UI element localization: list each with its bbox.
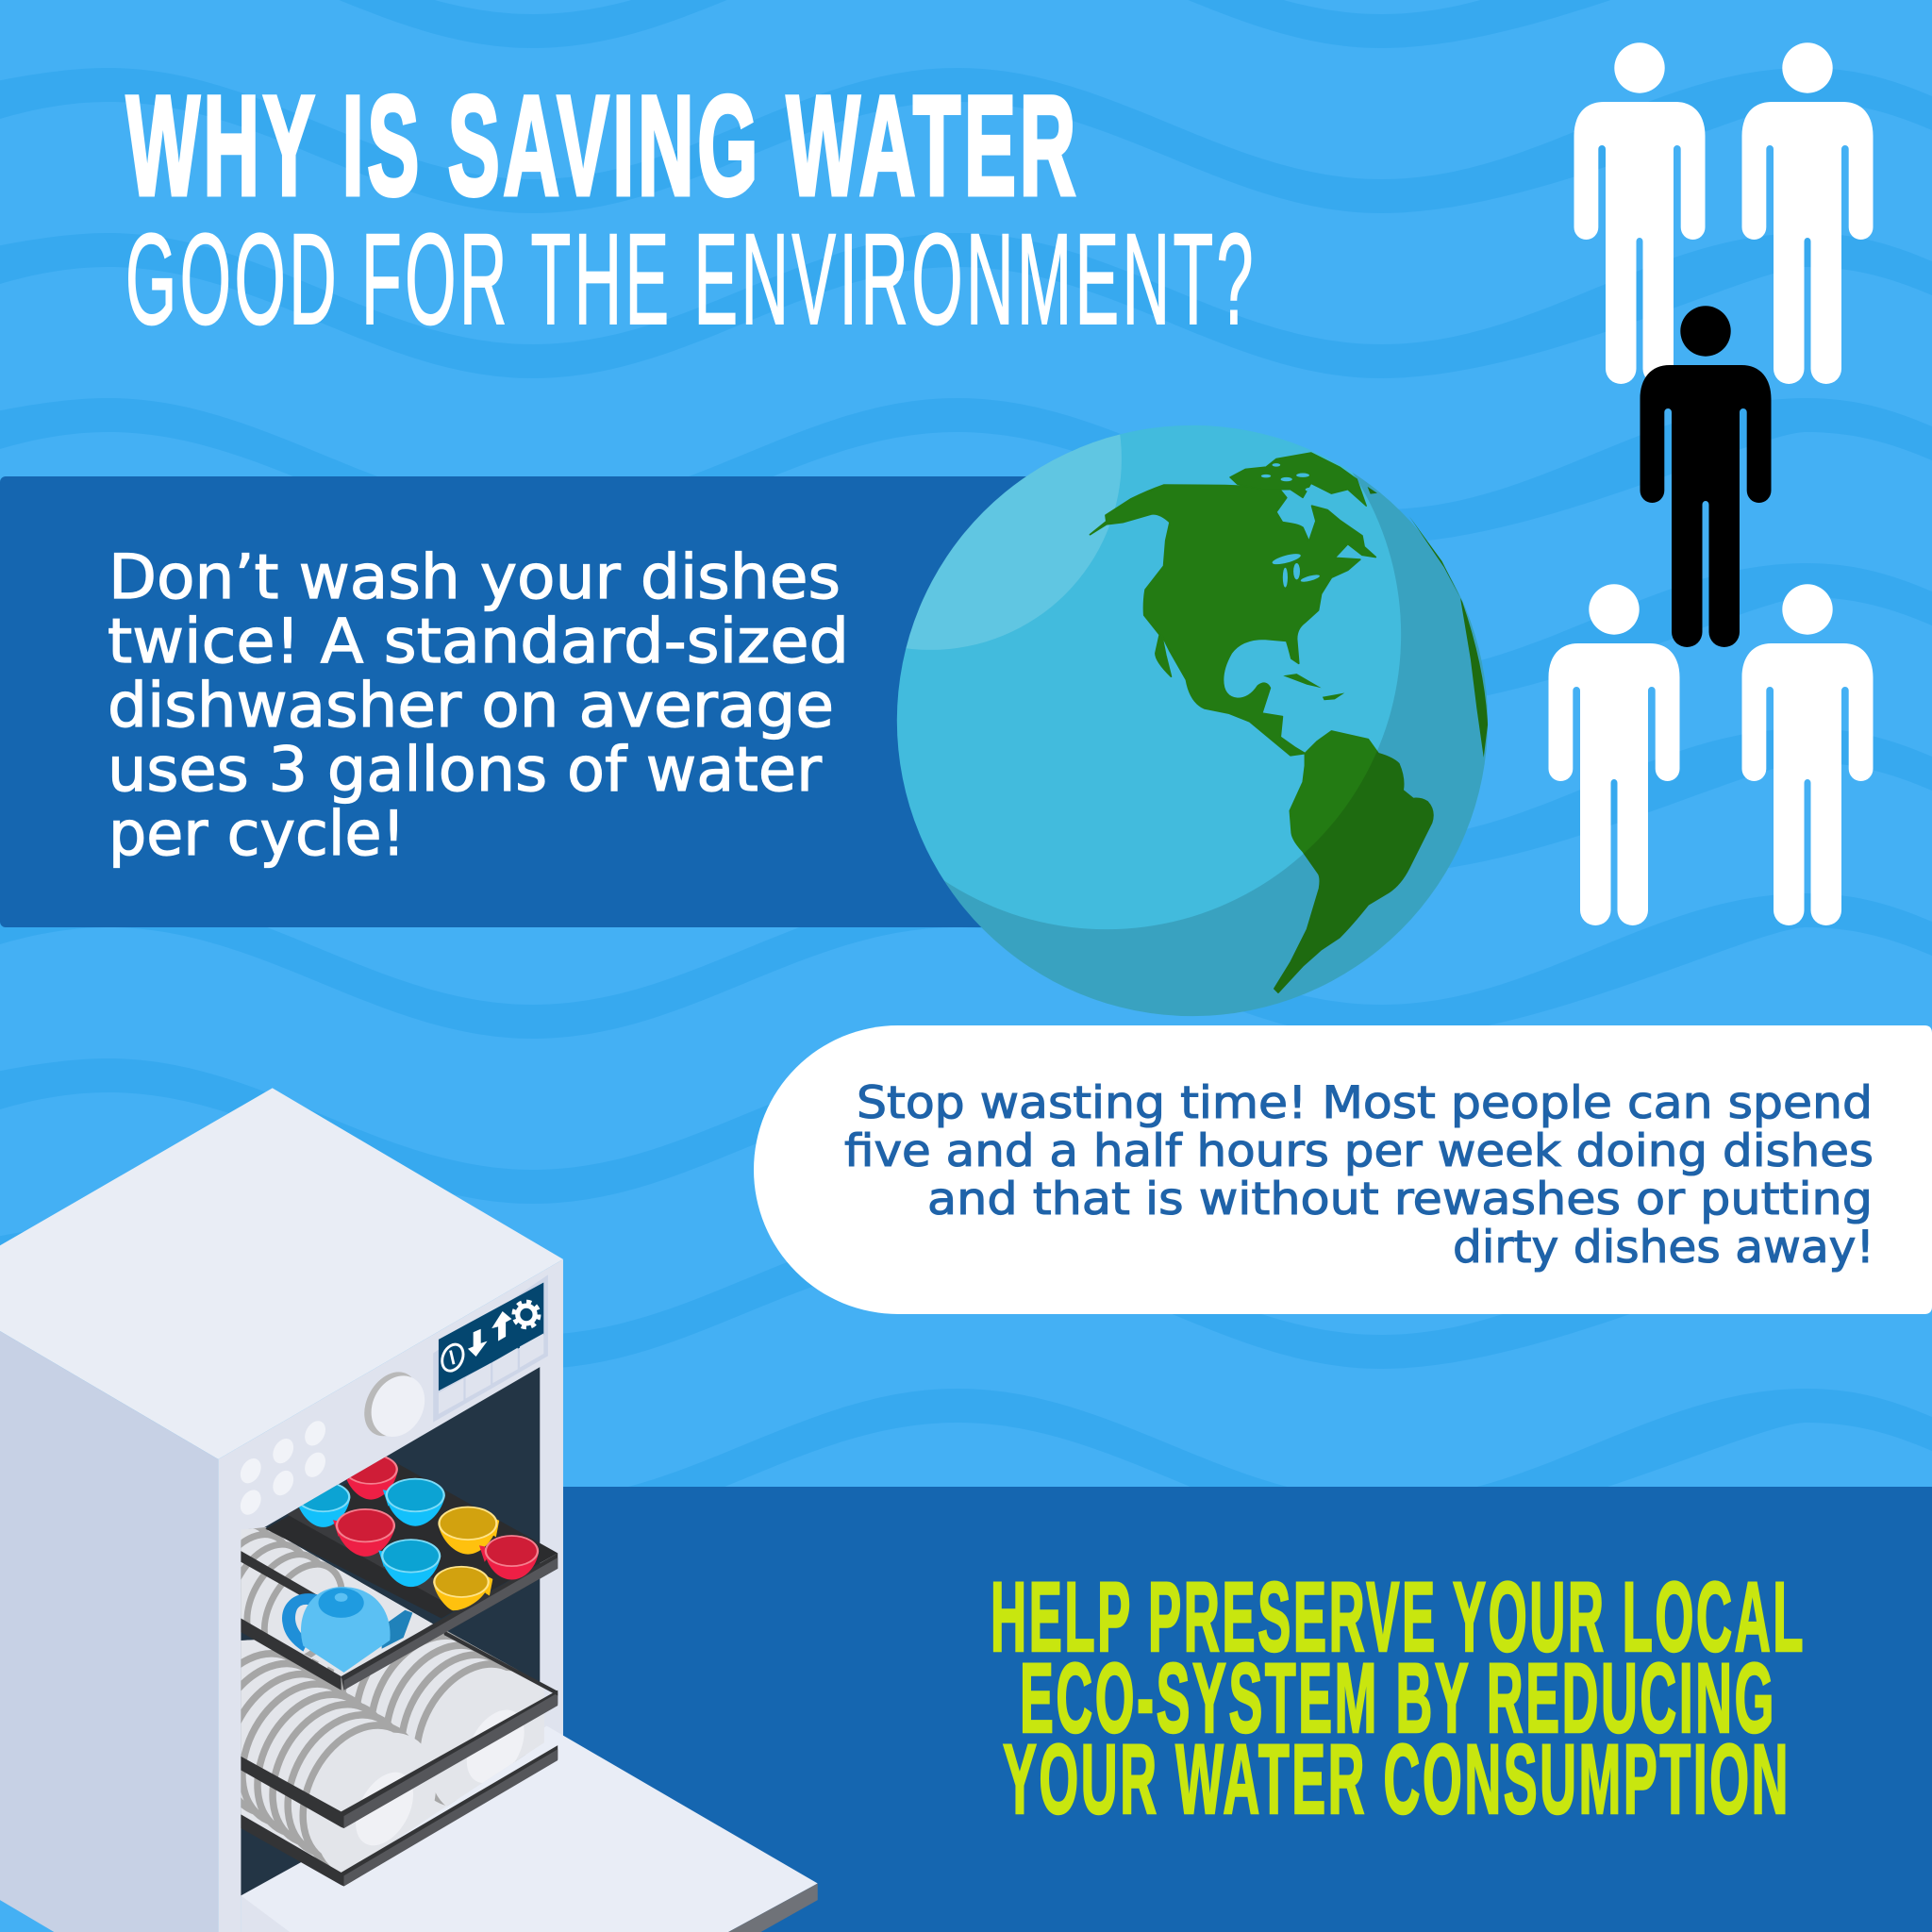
person icon: top left <box>1574 42 1706 384</box>
tip text: Don’t wash your dishes <box>108 542 841 613</box>
callout text: and that is without rewashes or putting <box>927 1174 1873 1225</box>
lower rack with plates <box>241 1631 558 1887</box>
tip text <box>108 542 849 870</box>
person icon: bottom right <box>1741 584 1874 925</box>
dishwasher illustration <box>0 1088 818 1932</box>
panel icons <box>438 1302 539 1374</box>
cavity <box>241 1367 540 1897</box>
panel: call to action <box>563 1487 1932 1932</box>
dial <box>354 1362 435 1447</box>
highlight <box>906 434 1122 650</box>
continent: caribbean <box>1283 674 1344 700</box>
callout text: five and a half hours per week doing dishes <box>844 1125 1874 1177</box>
blue cup <box>383 1478 445 1526</box>
tip text: per cycle! <box>108 799 406 870</box>
globe <box>896 425 1489 1017</box>
control buttons <box>236 1417 329 1519</box>
yellow cup <box>438 1507 499 1555</box>
tip text: uses 3 gallons of water <box>108 735 822 806</box>
upper rack <box>241 1457 558 1690</box>
panel: dishes tip <box>0 476 1132 927</box>
title <box>125 66 1257 352</box>
callout text: dirty dishes away! <box>1453 1222 1874 1274</box>
tip text: dishwasher on average <box>108 671 834 741</box>
title line 1: WHY IS SAVING WATER <box>126 66 1079 225</box>
yellow cup <box>433 1566 492 1610</box>
cups <box>296 1454 539 1610</box>
blue cup <box>299 1484 351 1527</box>
great lakes and arctic channels <box>1261 463 1321 588</box>
continent: africa edge <box>1368 487 1488 758</box>
continent: south america <box>1274 731 1433 992</box>
callout: stop wasting time <box>754 1025 1932 1314</box>
control panel <box>433 1274 548 1423</box>
open door <box>241 1726 818 1932</box>
blue cup <box>378 1539 441 1587</box>
call to action text <box>991 1562 1806 1835</box>
person icon: top right <box>1741 42 1874 384</box>
callout text <box>844 1077 1874 1274</box>
dishwasher front <box>218 1259 563 1932</box>
continent: north america <box>1091 485 1375 756</box>
icon: teapot <box>282 1587 412 1673</box>
callout text: Stop wasting time! Most people can spend <box>857 1077 1873 1129</box>
shadow <box>944 473 1488 1016</box>
upper plates <box>242 1527 433 1675</box>
tip text: twice! A standard-sized <box>108 607 849 677</box>
person icon: bottom left <box>1549 584 1679 925</box>
person icon: black centre <box>1640 306 1772 647</box>
red cup <box>333 1508 395 1557</box>
dishwasher side <box>0 1331 218 1932</box>
red cup <box>347 1457 398 1500</box>
continent: arctic islands <box>1230 453 1366 506</box>
red cup <box>479 1535 539 1580</box>
dishwasher top face <box>0 1088 563 1459</box>
people group <box>1549 42 1874 925</box>
cup tray <box>265 1459 558 1619</box>
